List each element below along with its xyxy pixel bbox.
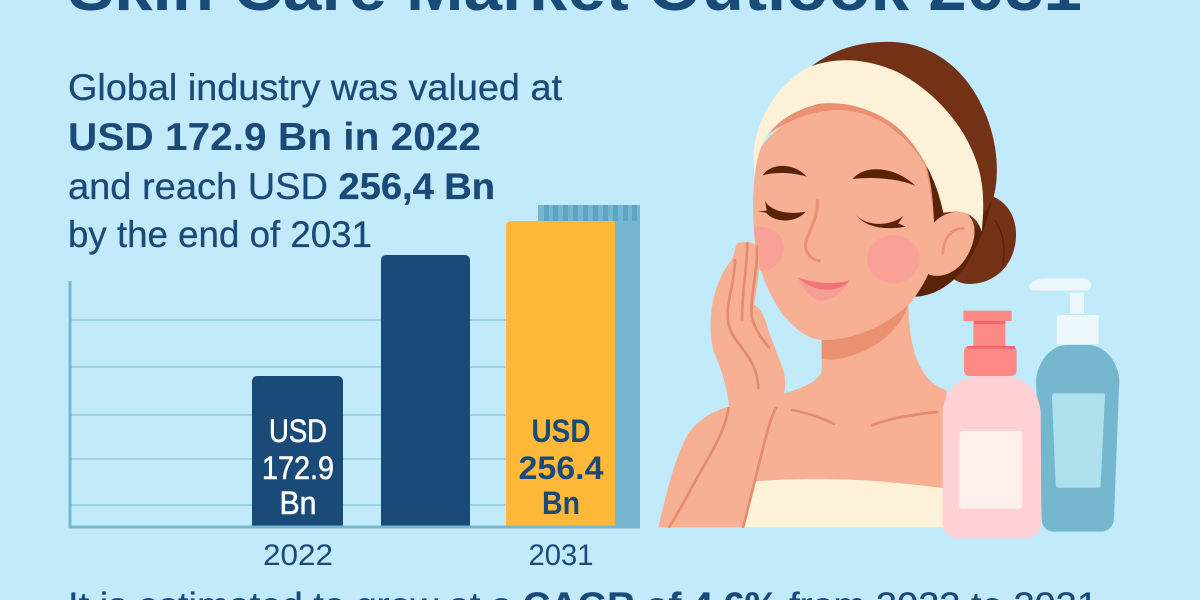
- text block: market value summary: by the end of 2031: [68, 214, 372, 255]
- neck shadow: [822, 302, 909, 359]
- bar label: 2031 value: USD: [532, 413, 590, 449]
- eyes: [758, 201, 806, 221]
- hand: [711, 242, 785, 408]
- face: [753, 108, 939, 340]
- text block: market value summary: USD 172.9 Bn in 2022: [68, 116, 481, 159]
- bar chart: [70, 205, 640, 572]
- illustration: woman applying skin care: [658, 42, 1119, 538]
- text block: market value summary: Global industry was valued at: [68, 67, 563, 108]
- bar label: 2031 value: Bn: [542, 485, 580, 521]
- hair back: [810, 42, 997, 297]
- text block: market value summary: [68, 67, 563, 255]
- mouth: [798, 277, 849, 301]
- bar label: 2031 value: 256.4: [518, 450, 604, 486]
- bar label: 2022 value: Bn: [280, 485, 316, 521]
- bar: middle: [381, 255, 470, 527]
- ear: [926, 212, 974, 276]
- hair shadow: [913, 198, 993, 297]
- nose: [805, 201, 819, 261]
- forehead shadow: [765, 102, 943, 222]
- pink pump bottle: [943, 311, 1041, 538]
- blue pump bottle: [1029, 278, 1119, 532]
- axis label: 2031: 2031: [528, 539, 594, 572]
- body and neck: [658, 300, 947, 527]
- cheeks: [755, 227, 920, 283]
- axis label: 2022: 2022: [263, 539, 333, 572]
- bar label: 2031 value: [518, 413, 604, 521]
- bar: 2022: [252, 376, 343, 527]
- bar label: 2022 value: [262, 413, 334, 521]
- towel: [743, 479, 945, 527]
- bar label: 2022 value: 172.9: [262, 450, 334, 486]
- axes: [70, 281, 640, 527]
- bar label: 2022 value: USD: [269, 413, 327, 449]
- teal backing panel: [538, 205, 640, 528]
- hair bun: [950, 197, 1016, 284]
- bar: 2031: [506, 221, 615, 527]
- arm and collar lines: [669, 401, 937, 527]
- text block: market value summary: and reach USD 256,4 Bn: [68, 166, 495, 207]
- eyebrows: [763, 166, 807, 177]
- finger lines: [728, 243, 769, 388]
- headband: [753, 60, 983, 232]
